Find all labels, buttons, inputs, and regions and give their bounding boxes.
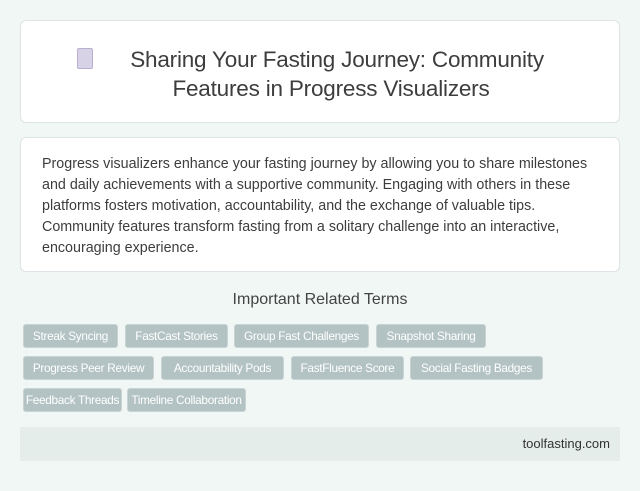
icon: document	[77, 48, 93, 69]
footer: toolfasting.com	[523, 436, 610, 451]
title: Sharing Your Fasting Journey: Community Features in Progress Visualizers	[130, 47, 544, 101]
tags: Feedback Threads	[26, 393, 119, 407]
tags: FastCast Stories	[135, 329, 218, 343]
terms heading: Important Related Terms	[233, 291, 407, 308]
tags: Streak Syncing	[33, 329, 108, 343]
tags: Timeline Collaboration	[131, 393, 242, 407]
tags: Social Fasting Badges	[421, 361, 532, 375]
tags: Group Fast Challenges	[244, 329, 359, 343]
tags: Progress Peer Review	[33, 361, 144, 375]
description text: Progress visualizers enhance your fasting journey by allowing you to share milestones and daily achievements with a supportive community. Engaging with others in these platforms fosters motivation, accountability, and the exchange of valuable tips. Community features transform fasting from a solitary challenge into an interactive, encouraging experience.	[42, 156, 587, 256]
footer	[20, 427, 620, 461]
tags: Accountability Pods	[174, 361, 271, 375]
tags: FastFluence Score	[301, 361, 394, 375]
tags: Snapshot Sharing	[386, 329, 476, 343]
description card	[20, 137, 620, 272]
title card	[20, 20, 620, 123]
